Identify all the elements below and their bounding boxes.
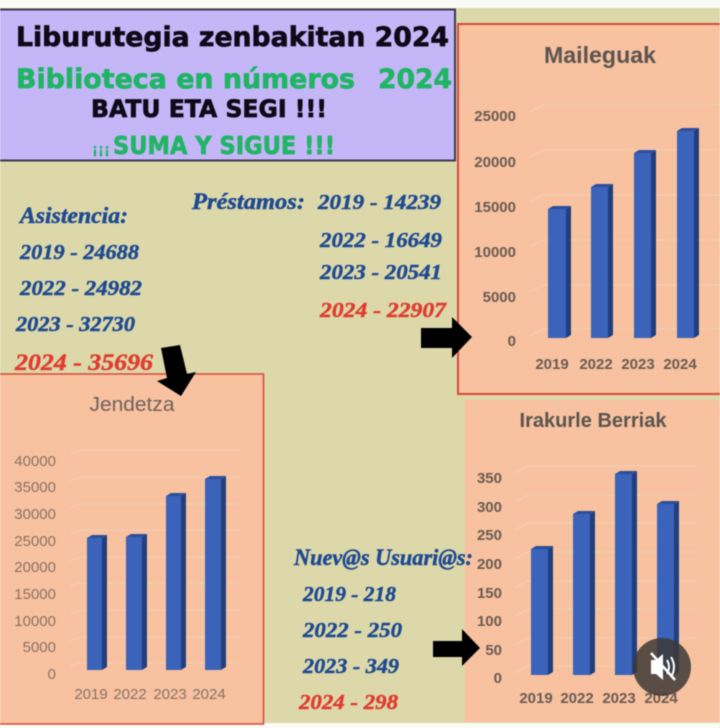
x axis labels xyxy=(519,690,678,707)
y axis labels: 100 xyxy=(477,613,502,630)
x axis labels: 2019 xyxy=(535,356,569,373)
text block: attendance: 2024 - 35696 xyxy=(14,350,154,375)
text block: attendance: 2019 - 24688 xyxy=(19,240,140,264)
panel: Maileguak chart xyxy=(458,24,720,394)
slogan: Basque: BATU ETA SEGI !!! xyxy=(91,95,327,123)
title: Basque: Liburutegia zenbakitan 2024 xyxy=(16,22,449,53)
x axis labels xyxy=(535,356,697,373)
y axis labels: 15000 xyxy=(474,199,516,216)
x axis labels: 2023 xyxy=(602,690,636,707)
x axis labels: 2023 xyxy=(153,686,187,703)
y axis labels xyxy=(477,470,502,687)
text block: new users: 2023 - 349 xyxy=(302,654,400,678)
panel: Jendetza chart xyxy=(0,374,264,724)
y axis labels: 15000 xyxy=(14,586,56,603)
x axis labels: 2024 xyxy=(663,356,697,373)
slogan: Spanish: SUMA Y SIGUE !!! xyxy=(113,131,335,160)
text block: new users: 2024 - 298 xyxy=(298,690,399,714)
y axis labels: 250 xyxy=(477,527,502,544)
x axis labels: 2022 xyxy=(560,690,594,707)
chart title: Irakurle Berriak xyxy=(520,410,667,432)
text block: new users: Nuev@s Usuari@s: xyxy=(293,545,473,570)
x axis labels: 2019 xyxy=(74,686,108,703)
y axis labels: 50 xyxy=(485,642,502,659)
text block: loans: 2024 - 22907 xyxy=(319,298,448,322)
text block: attendance: 2023 - 32730 xyxy=(15,312,136,336)
y axis labels: 350 xyxy=(477,470,502,487)
text block: loans: 2019 - 14239 xyxy=(317,190,442,214)
text block: loans: Préstamos: xyxy=(191,189,305,214)
text block: loans: 2023 - 20541 xyxy=(319,260,442,284)
title: Spanish: Biblioteca en números xyxy=(16,64,355,95)
x axis labels: 2023 xyxy=(621,356,655,373)
text block: attendance xyxy=(14,203,154,375)
header panel xyxy=(0,10,455,160)
bars xyxy=(87,476,226,670)
chart title: Maileguak xyxy=(544,42,656,68)
x axis labels: 2019 xyxy=(519,690,553,707)
arrow: loans to Maileguak chart xyxy=(421,317,472,358)
text block: attendance: Asistencia: xyxy=(18,203,128,228)
chart title: Jendetza xyxy=(90,394,175,416)
text block: attendance: 2022 - 24982 xyxy=(19,276,143,300)
title: Spanish: 2024 xyxy=(378,64,452,95)
arrow: new users to Irakurle Berriak chart xyxy=(433,629,480,666)
y axis labels: 0 xyxy=(494,670,502,687)
text block: new users: 2022 - 250 xyxy=(302,618,403,642)
y axis labels: 20000 xyxy=(474,154,516,171)
y axis labels: 25000 xyxy=(474,108,516,125)
y axis labels: 20000 xyxy=(14,559,56,576)
y axis labels xyxy=(474,108,516,350)
y axis labels: 40000 xyxy=(14,453,56,470)
y axis labels: 10000 xyxy=(474,244,516,261)
x axis labels: 2024 xyxy=(644,690,678,707)
y axis labels: 35000 xyxy=(14,479,56,496)
icon: muted speaker button xyxy=(633,638,691,696)
text block: loans: 2022 - 16649 xyxy=(319,228,443,252)
y axis labels: 300 xyxy=(477,499,502,516)
x axis labels: 2024 xyxy=(192,686,226,703)
y axis labels: 150 xyxy=(477,585,502,602)
bars xyxy=(548,128,699,338)
text block: new users xyxy=(293,545,473,714)
y axis labels: 30000 xyxy=(14,506,56,523)
y axis labels: 5000 xyxy=(23,639,56,656)
y axis labels: 200 xyxy=(477,556,502,573)
y axis labels: 0 xyxy=(48,666,56,683)
slogan: Spanish: ¡¡¡ xyxy=(92,142,110,158)
x axis labels: 2022 xyxy=(579,356,613,373)
text block: new users: 2019 - 218 xyxy=(302,582,397,606)
panel: Irakurle Berriak chart xyxy=(465,400,720,722)
x axis labels xyxy=(74,686,226,703)
text block: loans xyxy=(191,189,448,322)
y axis labels: 0 xyxy=(508,333,516,350)
x axis labels: 2022 xyxy=(113,686,147,703)
bars xyxy=(531,471,679,675)
y axis labels: 10000 xyxy=(14,613,56,630)
y axis labels: 25000 xyxy=(14,533,56,550)
y axis labels: 5000 xyxy=(483,289,516,306)
y axis labels xyxy=(14,453,56,683)
arrow: attendance to Jendetza chart xyxy=(157,345,196,396)
